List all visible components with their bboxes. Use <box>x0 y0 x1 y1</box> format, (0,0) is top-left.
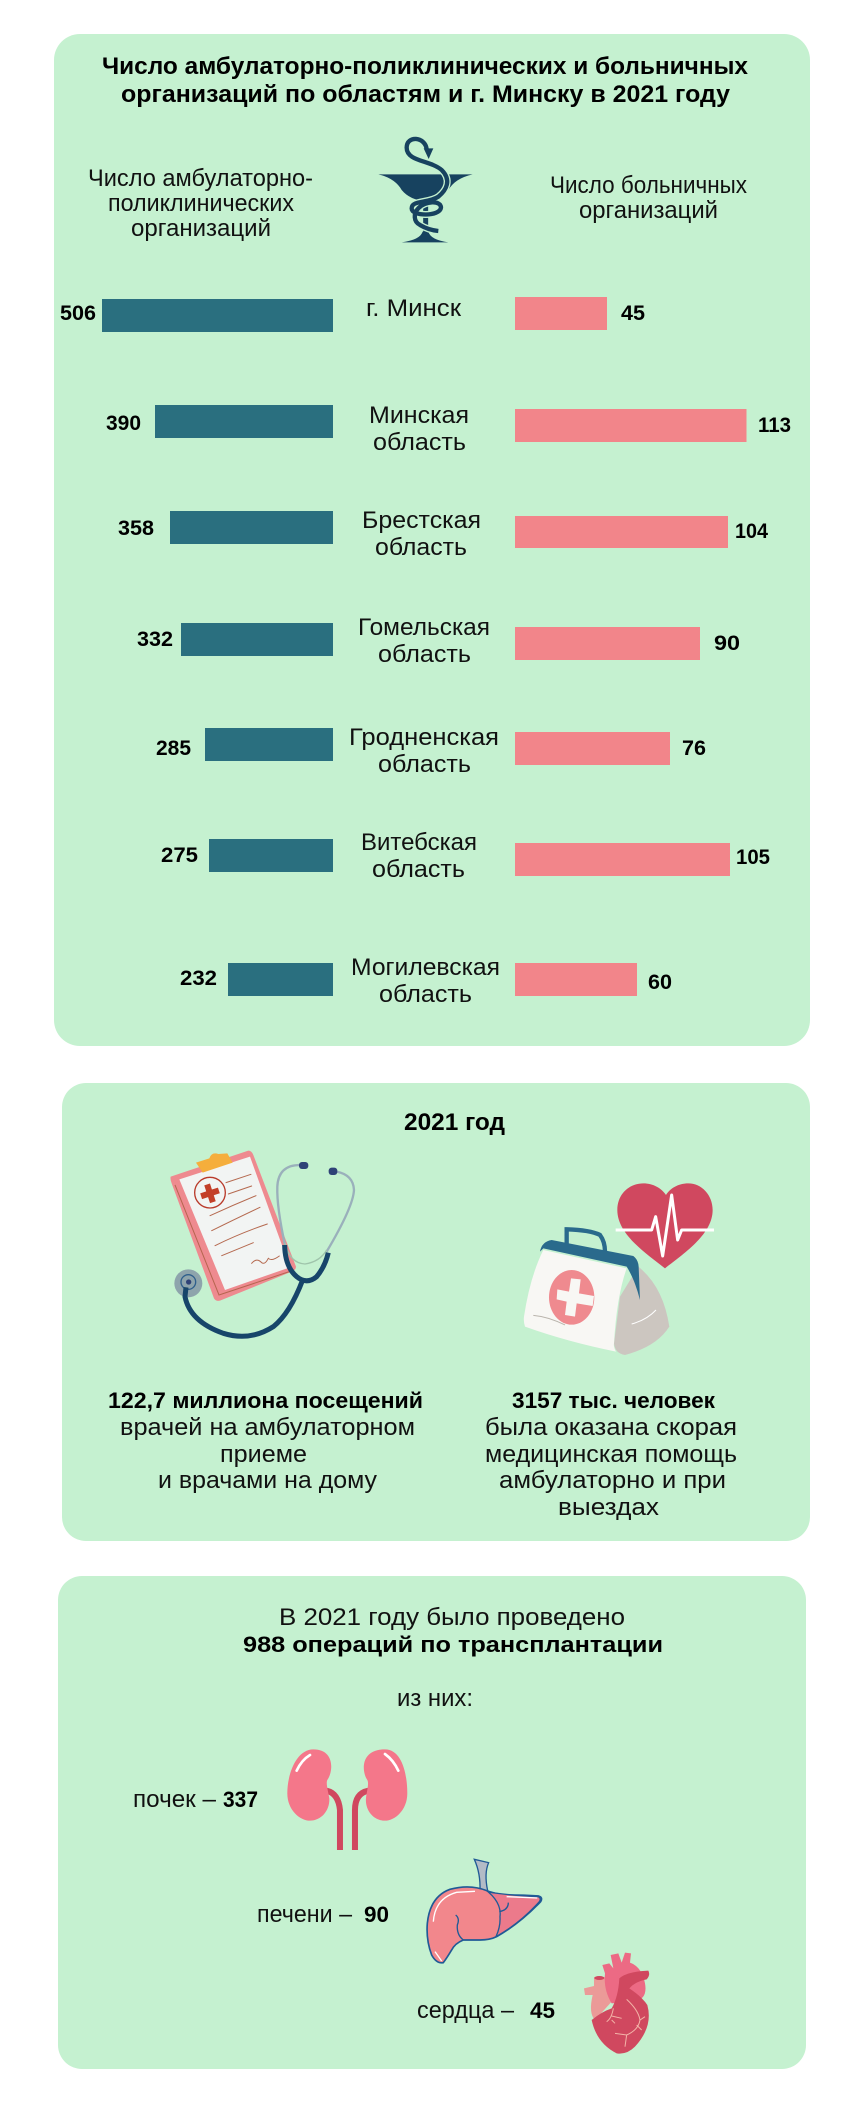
row: Vitebsk region <box>161 829 770 883</box>
icon: liver <box>427 1859 542 1963</box>
row: Grodno region: 285 <box>156 737 191 760</box>
text: visits: 122,7 миллиона посещений <box>108 1388 423 1413</box>
row: Brest region: область <box>375 534 467 561</box>
row: Minsk region: Минская <box>369 402 469 429</box>
text: transplant total: В 2021 году было проведено <box>279 1604 625 1631</box>
heading: 2021: 2021 год <box>404 1109 505 1136</box>
text: emergency care: 3157 тыс. человек <box>512 1388 716 1413</box>
title: организаций по областям и г. Минску в 2021 году <box>121 81 731 108</box>
label: kidneys: почек – <box>133 1786 217 1813</box>
row: Gomel region: область <box>378 641 471 668</box>
icon: heart organ <box>584 1953 649 2054</box>
row: Mogilev region: область <box>379 981 472 1008</box>
label: heart: 45 <box>530 1998 555 2023</box>
row: Brest region: 104 <box>735 520 768 543</box>
label: liver: 90 <box>364 1902 389 1927</box>
label: kidneys <box>133 1786 258 1813</box>
text: emergency care: медицинская помощь <box>485 1441 737 1468</box>
row: Minsk city: 506 <box>60 302 96 325</box>
row: Grodno region: область <box>378 751 471 778</box>
row: Vitebsk region: область <box>372 856 465 883</box>
icon: bowl of hygieia <box>378 139 473 242</box>
text: emergency care: амбулаторно и при <box>499 1467 726 1494</box>
title <box>102 53 749 108</box>
row: Minsk city <box>60 295 645 332</box>
row: Brest region: Брестская <box>362 507 481 534</box>
row: Brest region: 358 <box>118 517 154 540</box>
text: transplant total: 988 операций по трансплантации <box>243 1632 663 1657</box>
left column heading: поликлинических <box>108 190 294 217</box>
right column heading: организаций <box>579 197 718 224</box>
row: Vitebsk region: 105 <box>736 846 770 869</box>
text: visits: приеме <box>220 1441 307 1468</box>
row: Minsk region: 113 <box>758 414 791 437</box>
row: Grodno region: 76 <box>682 737 706 760</box>
row: Mogilev region: Могилевская <box>351 954 500 981</box>
text: transplant total <box>243 1604 663 1657</box>
panel: 2021 statistics <box>62 1083 810 1541</box>
left column heading: Число амбулаторно- <box>88 165 313 192</box>
text: of which: из них: <box>397 1685 473 1712</box>
row: Minsk region: 390 <box>106 412 141 435</box>
icon: clipboard and stethoscope <box>170 1151 354 1336</box>
row: Vitebsk region: 275 <box>161 844 198 867</box>
row: Mogilev region <box>180 954 672 1008</box>
row: Grodno region: Гродненская <box>349 724 499 751</box>
right column heading: Число больничных <box>550 172 747 199</box>
row: Brest region <box>118 507 768 561</box>
text: emergency care: была оказана скорая <box>485 1414 737 1441</box>
title: Число амбулаторно-поликлинических и больничных <box>102 53 749 80</box>
label: liver: печени – <box>257 1901 353 1928</box>
panel: organizations by region <box>54 34 810 1046</box>
text: emergency care <box>485 1388 737 1521</box>
left column heading <box>88 165 313 242</box>
panel: transplants <box>58 1576 806 2069</box>
icon: medical bag with heart <box>524 1183 714 1355</box>
icon: kidneys <box>287 1749 407 1850</box>
row: Mogilev region: 232 <box>180 967 217 990</box>
label: kidneys: 337 <box>223 1787 258 1812</box>
row: Mogilev region: 60 <box>648 971 672 994</box>
row: Minsk region: область <box>373 429 466 456</box>
row: Gomel region <box>137 614 740 668</box>
row: Minsk region <box>106 402 791 456</box>
row: Minsk city: г. Минск <box>366 295 462 322</box>
row: Gomel region: Гомельская <box>358 614 490 641</box>
left column heading: организаций <box>131 215 271 242</box>
row: Gomel region: 90 <box>714 632 740 655</box>
right column heading <box>550 172 747 224</box>
row: Gomel region: 332 <box>137 628 173 651</box>
row: Minsk city: 45 <box>621 302 645 325</box>
text: visits <box>108 1388 423 1494</box>
label: heart: сердца – <box>417 1997 515 2024</box>
row: Vitebsk region: Витебская <box>361 829 477 856</box>
text: visits: и врачами на дому <box>158 1467 377 1494</box>
text: visits: врачей на амбулаторном <box>120 1414 415 1441</box>
row: Grodno region <box>156 724 706 778</box>
text: emergency care: выездах <box>558 1494 659 1521</box>
